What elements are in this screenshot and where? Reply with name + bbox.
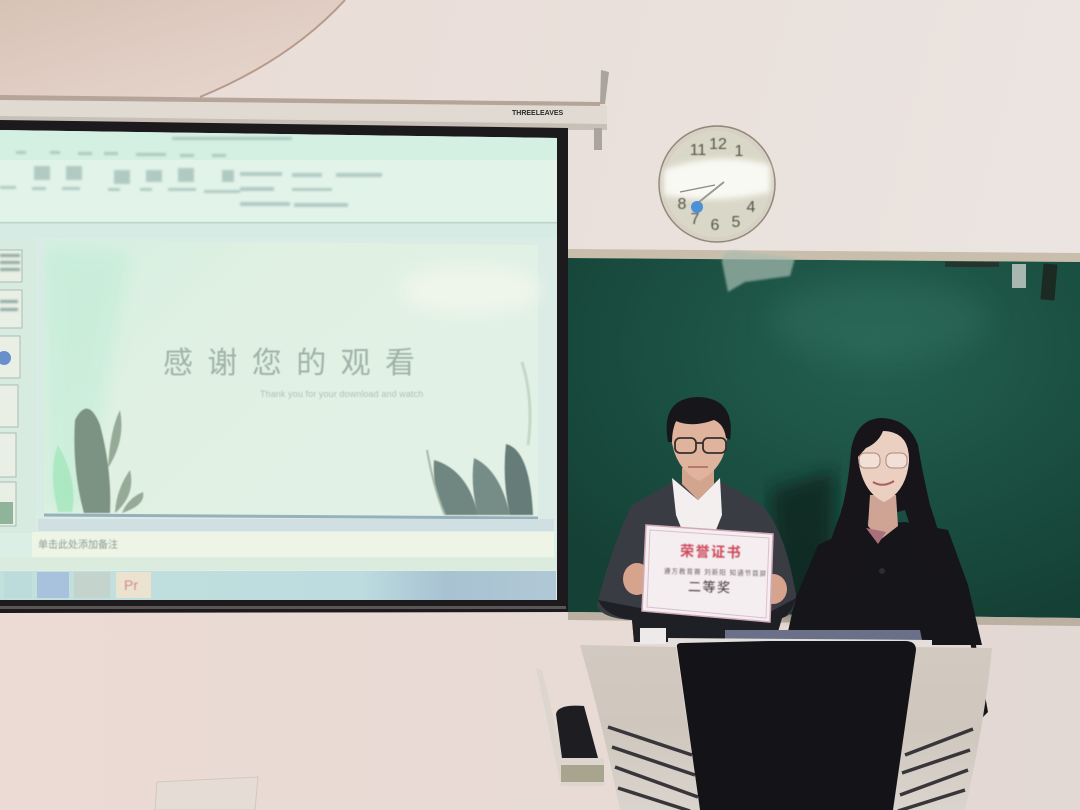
neck (682, 468, 714, 500)
buttons (879, 568, 885, 574)
right vents (898, 729, 973, 810)
smile (873, 481, 894, 485)
taskbar (0, 571, 556, 600)
glasses (859, 453, 907, 468)
arm (970, 640, 988, 718)
clock: 12 (709, 136, 727, 153)
slide (36, 238, 557, 531)
leaf left (53, 409, 143, 513)
clock: 1 (735, 143, 744, 160)
glasses (675, 438, 726, 453)
ceiling (0, 0, 345, 97)
certificate line: 遵方教育赛 刘新阳 知通节首屏 (664, 566, 767, 578)
left panel (580, 645, 700, 810)
shirt (672, 478, 722, 530)
brand label: THREELEAVES (512, 110, 564, 117)
cable (200, 0, 345, 97)
drawer (536, 668, 604, 786)
right panel (890, 647, 992, 810)
clock: 11 (690, 142, 706, 159)
hair (667, 397, 731, 442)
clock: 8 (678, 196, 687, 213)
body (785, 522, 982, 645)
jacket (597, 482, 796, 642)
podium (536, 628, 992, 810)
slide title: 感谢您的观看 (163, 347, 429, 380)
face (858, 431, 909, 502)
left vents (608, 727, 698, 810)
clock (659, 126, 775, 242)
neck and collar (868, 495, 898, 540)
monitor (677, 641, 916, 810)
paper on floor edge (155, 777, 258, 810)
ribbon toolbar (0, 130, 557, 238)
certificate grade: 二等奖 (688, 579, 732, 595)
chalkboard (568, 249, 1080, 626)
notes pane (32, 532, 554, 557)
clock: 5 (732, 214, 741, 231)
notes pane: 单击此处添加备注 (38, 538, 118, 551)
status bar (0, 558, 557, 570)
clock: 4 (747, 199, 756, 216)
taskbar: Pr (124, 577, 138, 593)
items on podium (725, 630, 922, 640)
shadow on board (770, 470, 835, 612)
hair (820, 418, 950, 587)
left thumbnail panel (0, 238, 36, 533)
certificate title: 荣誉证书 (680, 543, 742, 561)
hair fringe (857, 428, 884, 458)
slide subtitle: Thank you for your download and watch (260, 389, 423, 399)
clock: 6 (711, 217, 720, 234)
projector screen (0, 120, 568, 613)
projector screen housing (0, 70, 609, 150)
woman (785, 418, 988, 718)
lower jacket (598, 598, 796, 642)
certificate (642, 525, 773, 622)
leaf right (427, 362, 533, 515)
face (671, 414, 727, 481)
mouth (688, 466, 708, 468)
clock: 7 (691, 211, 700, 228)
man (597, 397, 796, 642)
hands (623, 563, 787, 604)
